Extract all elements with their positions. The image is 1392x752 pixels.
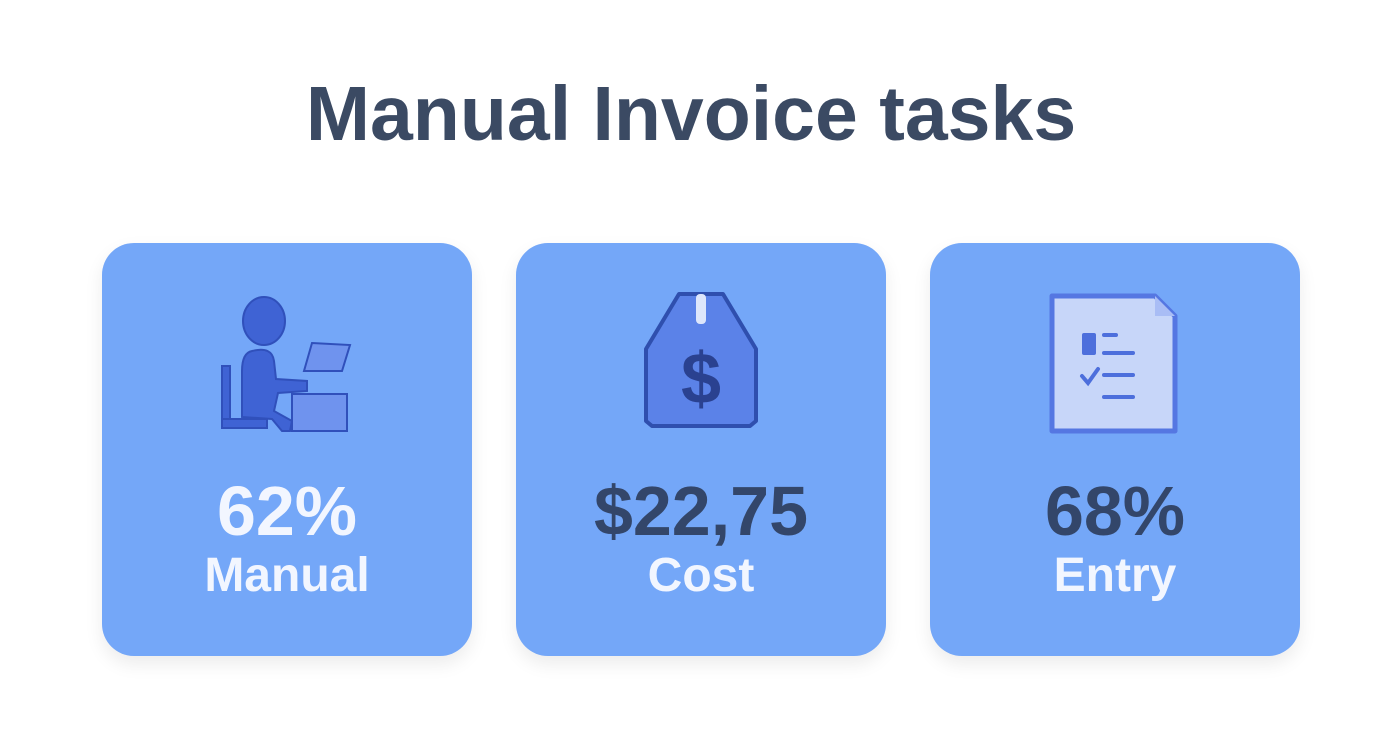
icon: price tag — [644, 292, 758, 428]
panel: entry — [930, 243, 1300, 656]
label: Manual: Manual — [204, 549, 370, 602]
label: Cost: Cost — [648, 549, 754, 602]
icon: document checklist — [1050, 294, 1178, 434]
stat: 68%: 68% — [1045, 472, 1185, 550]
stat: $22,75: $22,75 — [594, 472, 808, 550]
icon: price tag: $ — [681, 339, 721, 419]
title: Manual Invoice tasks — [306, 71, 1076, 157]
icon: person at desk — [221, 296, 352, 432]
panel: manual — [102, 243, 472, 656]
panel: cost — [516, 243, 886, 656]
label: Entry: Entry — [1054, 549, 1176, 602]
stat: 62%: 62% — [217, 472, 357, 550]
